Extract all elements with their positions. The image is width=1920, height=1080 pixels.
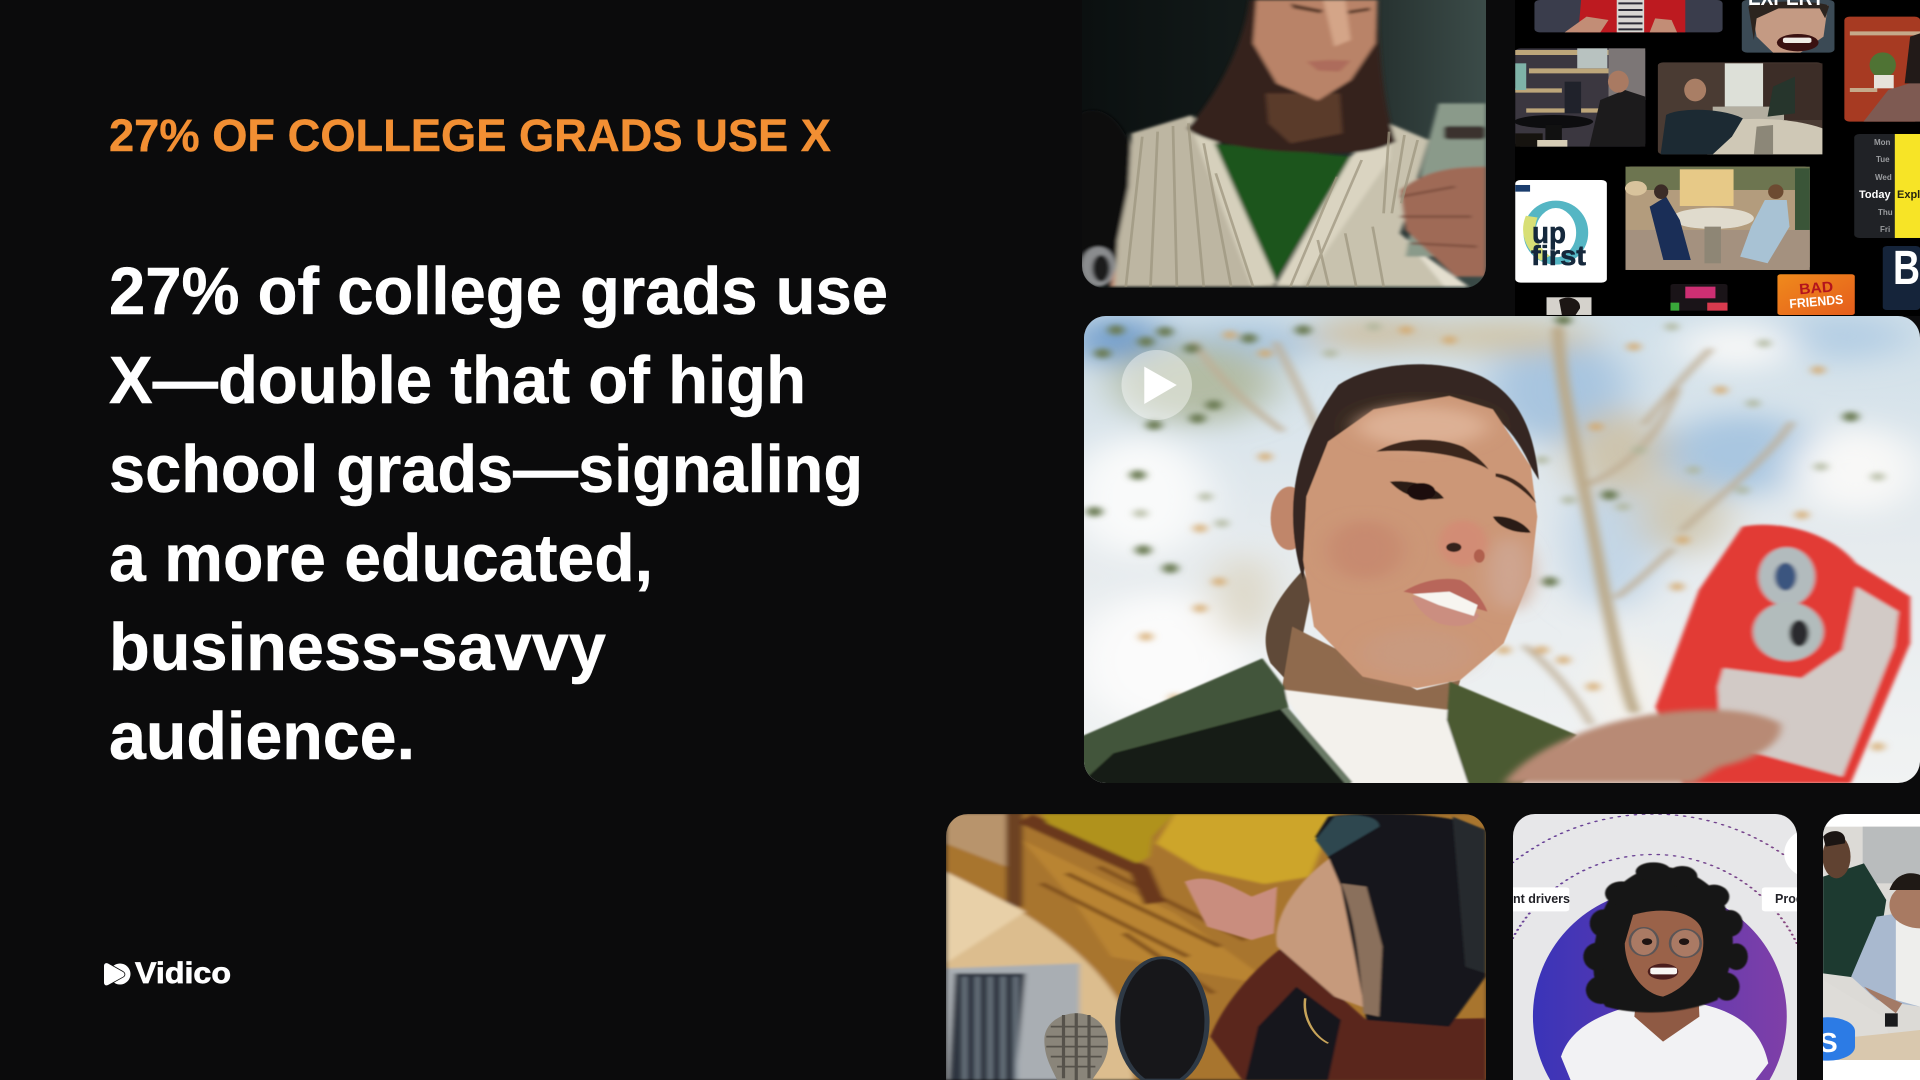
thumbnail text: schedule days: Wed — [1875, 173, 1892, 182]
text block: main statement — [109, 254, 888, 774]
thumbnail: two women at round table — [1625, 167, 1810, 270]
thumbnail: shouting man — [1742, 0, 1834, 53]
office photo — [1822, 827, 1920, 1060]
button: blue pill — [1800, 1017, 1855, 1061]
text block: main statement: audience. — [109, 699, 415, 774]
panel: smiling woman with glasses and dotted rings — [1513, 814, 1797, 1080]
text block: main statement: business-savvy — [109, 610, 606, 685]
thumbnail: Bad Friends cover — [1777, 274, 1855, 315]
button label: S — [1819, 1027, 1838, 1058]
gradient circle — [1533, 890, 1787, 1080]
thumbnail: partial face — [1547, 297, 1591, 315]
thumbnail text: schedule days: Mon — [1874, 138, 1891, 147]
thumbnail: man on couch — [1658, 62, 1822, 154]
thumbnail: guest in red jacket — [1534, 0, 1723, 32]
thumbnail: woman with shelf — [1844, 17, 1920, 122]
jacket and t-shirt — [1081, 658, 1577, 785]
thumbnail text: schedule days — [1874, 138, 1893, 234]
photo panel: woman looking at red phone, centre — [1070, 313, 1920, 785]
logo: Vidico — [104, 957, 231, 990]
white circle chip — [1784, 832, 1797, 874]
microphone — [1044, 1013, 1108, 1080]
label: Prod: Prod — [1775, 892, 1803, 906]
thumbnail text: Expl: Expl — [1897, 189, 1920, 201]
thumbnail text: schedule days: Fri — [1880, 225, 1890, 234]
thumbnail text: schedule days: Tue — [1876, 155, 1890, 164]
thumbnail: Today Explained schedule — [1854, 134, 1920, 238]
thumbnail text: up: up — [1532, 215, 1566, 250]
thumbnail text: schedule days: Thu — [1878, 208, 1893, 217]
chip: right pill — [1762, 888, 1797, 912]
thumbnail text: Today: Today — [1859, 189, 1891, 201]
thumbnail: up first podcast cover — [1515, 180, 1607, 283]
thumbnail text: Bad Friends: FRIENDS — [1789, 292, 1844, 311]
photo panel: woman recording podcast — [946, 813, 1488, 1080]
icon: play logo mark — [104, 963, 130, 985]
curly hair — [1583, 862, 1748, 1012]
chip: left pill — [1513, 887, 1570, 912]
label: drivers: nt drivers — [1513, 892, 1570, 906]
thumbnail text: first: first — [1531, 240, 1586, 271]
text block: main statement: X—double that of high — [109, 343, 806, 418]
text block: main statement: 27% of college grads use — [109, 254, 888, 329]
pop filter — [1118, 958, 1207, 1080]
photo panel: woman holding phone, top — [1046, 0, 1488, 288]
woman — [1266, 364, 1539, 715]
icon: play button — [1121, 350, 1192, 420]
panel: colleagues at laptop — [1800, 814, 1920, 1080]
text block: main statement: a more educated, — [109, 521, 653, 596]
dotted rings — [1513, 814, 1797, 944]
wordmark: Vidico — [135, 957, 231, 990]
thumbnail: studio with shelves — [1514, 48, 1645, 147]
panel: podcast thumbnail montage — [1514, 0, 1920, 316]
sky and tree background — [1070, 313, 1920, 785]
text block: main statement: school grads—signaling — [109, 432, 863, 507]
heading: eyebrow: 27% OF COLLEGE GRADS USE X — [109, 110, 831, 161]
red phone and hand — [1655, 525, 1910, 783]
thumbnail: navy cover — [1883, 246, 1920, 310]
thumbnail text: Bad Friends — [1790, 282, 1843, 308]
thumbnail text: Bad Friends: BAD — [1798, 278, 1834, 298]
woman portrait — [1561, 862, 1768, 1080]
thumbnail: pink cover — [1670, 284, 1728, 311]
